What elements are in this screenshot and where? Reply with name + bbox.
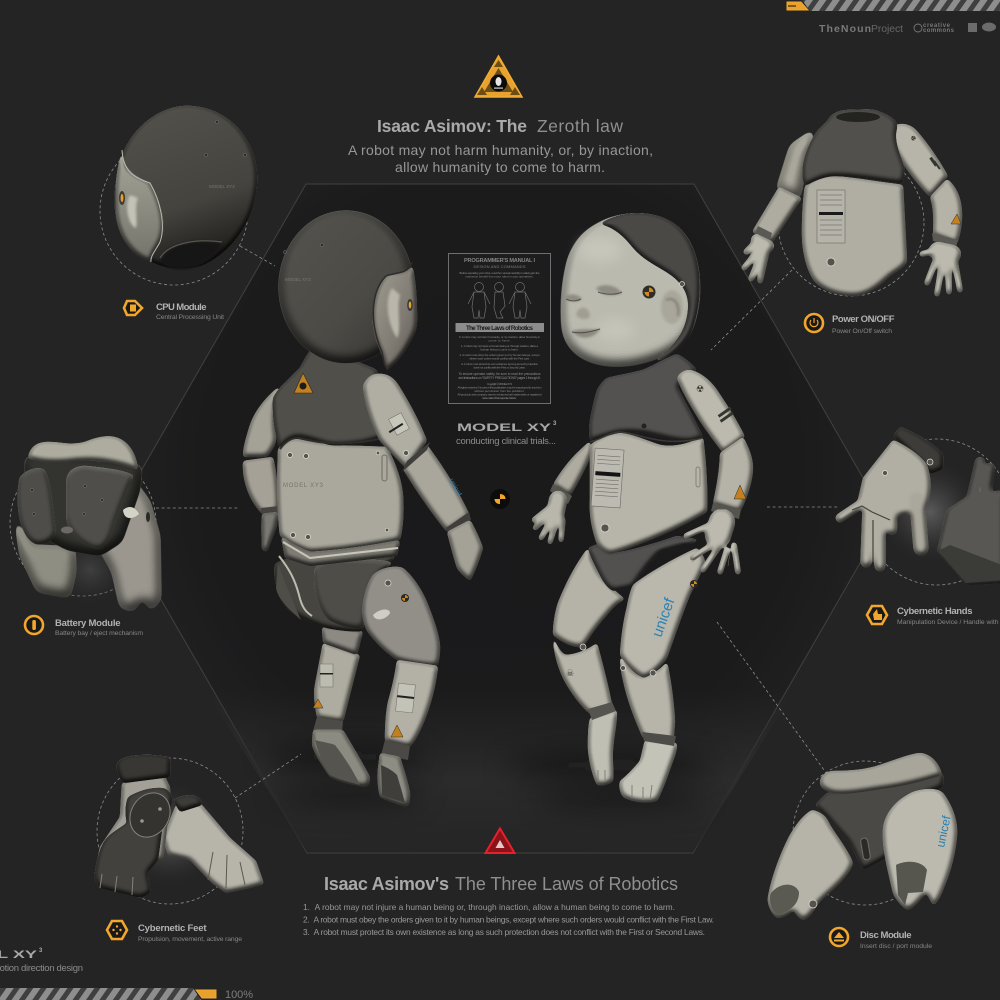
panel: programmer's manual	[448, 254, 550, 404]
icon: crash test marker	[490, 489, 510, 509]
label: Power ON/OFF: Power On/Off switch	[832, 328, 892, 335]
heading: Model XY3	[456, 421, 557, 447]
panel: programmer's manual: human being to come to harm.	[480, 348, 519, 352]
label: Cybernetic Hands	[867, 606, 1000, 626]
icon: red warning triangle	[486, 828, 514, 853]
dashed callout circles and leader lines	[10, 137, 1000, 905]
robot B belly sticker	[591, 448, 624, 508]
panel: programmer's manual: The Three Laws of Robotics	[466, 325, 534, 332]
robot B left leg	[553, 548, 625, 785]
robot B head	[561, 213, 700, 366]
robot B left leg: ☠	[566, 668, 574, 678]
label: Disc Module	[830, 928, 932, 950]
label: CPU Module: CPU Module	[156, 302, 207, 313]
module: CPU head	[115, 106, 257, 269]
heading: three laws	[324, 874, 678, 894]
manual baby outlines	[468, 282, 531, 318]
credits logos: creative	[923, 23, 951, 29]
robot A left arm	[243, 386, 280, 552]
panel: programmer's manual: Before operating your robot, read the manual carefully to safely gain the	[460, 271, 540, 275]
panel: programmer's manual: 3. A robot must protect its own existence as long as such protection	[461, 362, 538, 366]
label: Disc Module: Insert disc / port module	[860, 943, 932, 950]
text: Zeroth law statement	[348, 142, 653, 175]
robot A torso: MODEL XY3	[283, 483, 324, 489]
module: Power torso: ☢	[909, 134, 917, 143]
footer: model xy3 caption: 3	[39, 948, 43, 954]
text: Zeroth law statement: allow humanity to come to harm.	[395, 159, 605, 175]
robot A head: MODEL XY3	[285, 277, 311, 282]
label: Disc Module: Disc Module	[860, 930, 912, 941]
label: CPU Module: Central Processing Unit	[156, 314, 224, 321]
credits logos: TheNoun	[819, 23, 871, 35]
panel: programmer's manual: come to harm.	[488, 338, 511, 342]
panel: programmer's manual: where such orders would conflict with the First Law.	[470, 356, 530, 360]
module: Cybernetic hands	[840, 427, 1000, 585]
panel: programmer's manual: PROGRAMMER'S MANUAL I	[464, 258, 535, 264]
text: three laws list: 2. A robot must obey the orders given to it by human beings, except where such orders would conflict with the First Law.	[303, 914, 714, 924]
power torso sticker	[817, 190, 845, 243]
top right progress bar	[787, 0, 1000, 11]
icon: amber warning triangle	[475, 56, 522, 97]
label: Cybernetic Hands: Cybernetic Hands	[897, 606, 973, 617]
hexagon frame	[114, 184, 886, 853]
panel: programmer's manual: Copyright © MODEL XY3	[487, 382, 512, 386]
label: Cybernetic Feet: Cybernetic Feet	[138, 923, 207, 934]
bottom progress bar	[0, 988, 253, 1000]
panel: programmer's manual: maximum benefit from your robot in your operations.	[466, 274, 534, 278]
panel: programmer's manual: and instructions on "SAFETY PRECAUTIONS" pages 1 through 8.	[458, 376, 541, 380]
robot A rear leg	[312, 627, 370, 787]
robot B right leg	[619, 548, 705, 802]
label: CPU Module	[124, 301, 224, 321]
text: three laws list: 1. A robot may not injure a human being or, through inaction, allow a human being to come to harm.	[303, 902, 675, 912]
unicef logo on disc module: unicef	[933, 814, 954, 849]
label: Battery Module	[25, 616, 143, 637]
module: Disc hips	[768, 753, 957, 920]
module: CPU head: MODEL XY3	[209, 184, 235, 189]
robot A hips	[274, 556, 397, 631]
credits logos: commons	[923, 28, 955, 34]
panel: programmer's manual: All rights reserved. No part of this publication may be reproduced in any form	[458, 386, 542, 390]
module: Battery hips	[14, 436, 161, 612]
module: Cybernetic feet	[95, 755, 264, 897]
robot A: back view	[243, 211, 483, 807]
title: Zeroth law: Isaac Asimov: The	[377, 116, 527, 136]
label: Cybernetic Feet	[107, 921, 242, 943]
text: three laws list	[303, 902, 714, 937]
label: Power ON/OFF: Power ON/OFF	[832, 314, 895, 325]
robot B left arm	[534, 441, 592, 542]
heading: three laws: Isaac Asimov's	[324, 874, 449, 894]
robot B right arm	[677, 370, 753, 572]
label: Cybernetic Feet: Propulsion, movement, active range	[138, 936, 242, 943]
robot B torso	[589, 354, 707, 554]
title: Zeroth law: Zeroth law	[537, 116, 623, 136]
heading: Model XY3: 3	[553, 421, 557, 427]
title: Zeroth law	[377, 116, 623, 136]
panel: programmer's manual: 1. A robot may not injure a human being or, through inaction, allow a	[461, 344, 538, 348]
robot B right arm: ☢	[696, 384, 704, 394]
text: Zeroth law statement: A robot may not harm humanity, or, by inaction,	[348, 142, 653, 158]
panel: programmer's manual: trademarks of their respective holders.	[482, 396, 517, 400]
robot B pelvis	[588, 536, 700, 591]
robot A right arm	[363, 374, 483, 581]
panel: programmer's manual: All products and company names mentioned are trademarks or registered	[458, 392, 542, 396]
unicef logo on thigh: unicef	[649, 595, 679, 639]
robot A arm unicef mark: unicef	[447, 478, 462, 497]
robot A crash marker	[401, 594, 409, 602]
robot A hazard triangle	[294, 373, 313, 393]
label: Battery Module: Battery Module	[55, 618, 121, 629]
footer: model xy3 caption	[0, 948, 83, 974]
text: three laws list: 3. A robot must protect its own existence as long as such protection does not conflict with the First or Second Laws.	[303, 927, 705, 937]
panel: programmer's manual: To ensure operator safety, be sure to read the precautions	[458, 372, 541, 376]
label: Battery Module: Battery bay / eject mechanism	[55, 630, 143, 637]
panel: programmer's manual: does not conflict with the First or Second Laws.	[474, 366, 526, 370]
panel: programmer's manual: without permission from the publisher.	[474, 389, 525, 393]
module: Power torso	[744, 110, 962, 296]
robot A right thigh	[362, 567, 440, 666]
robot A head	[279, 211, 417, 370]
heading: Model XY3: MODEL XY	[457, 422, 552, 434]
robot A torso	[273, 348, 403, 566]
panel: programmer's manual: 2. A robot must obey the orders given to it by human beings, except	[460, 353, 540, 357]
panel: programmer's manual: 0. A robot may not harm humanity, or, by inaction, allow humanity to	[459, 335, 540, 339]
heading: three laws: The Three Laws of Robotics	[455, 874, 678, 894]
credits logos	[819, 22, 996, 35]
label: Power ON/OFF	[805, 314, 895, 335]
heading: Model XY3: conducting clinical trials...	[456, 436, 556, 447]
robot A front leg	[378, 660, 438, 807]
robot B: front view	[534, 213, 753, 802]
panel: programmer's manual: DESIGN AND COMMANDS	[474, 264, 526, 269]
credits logos: Project	[871, 23, 903, 35]
